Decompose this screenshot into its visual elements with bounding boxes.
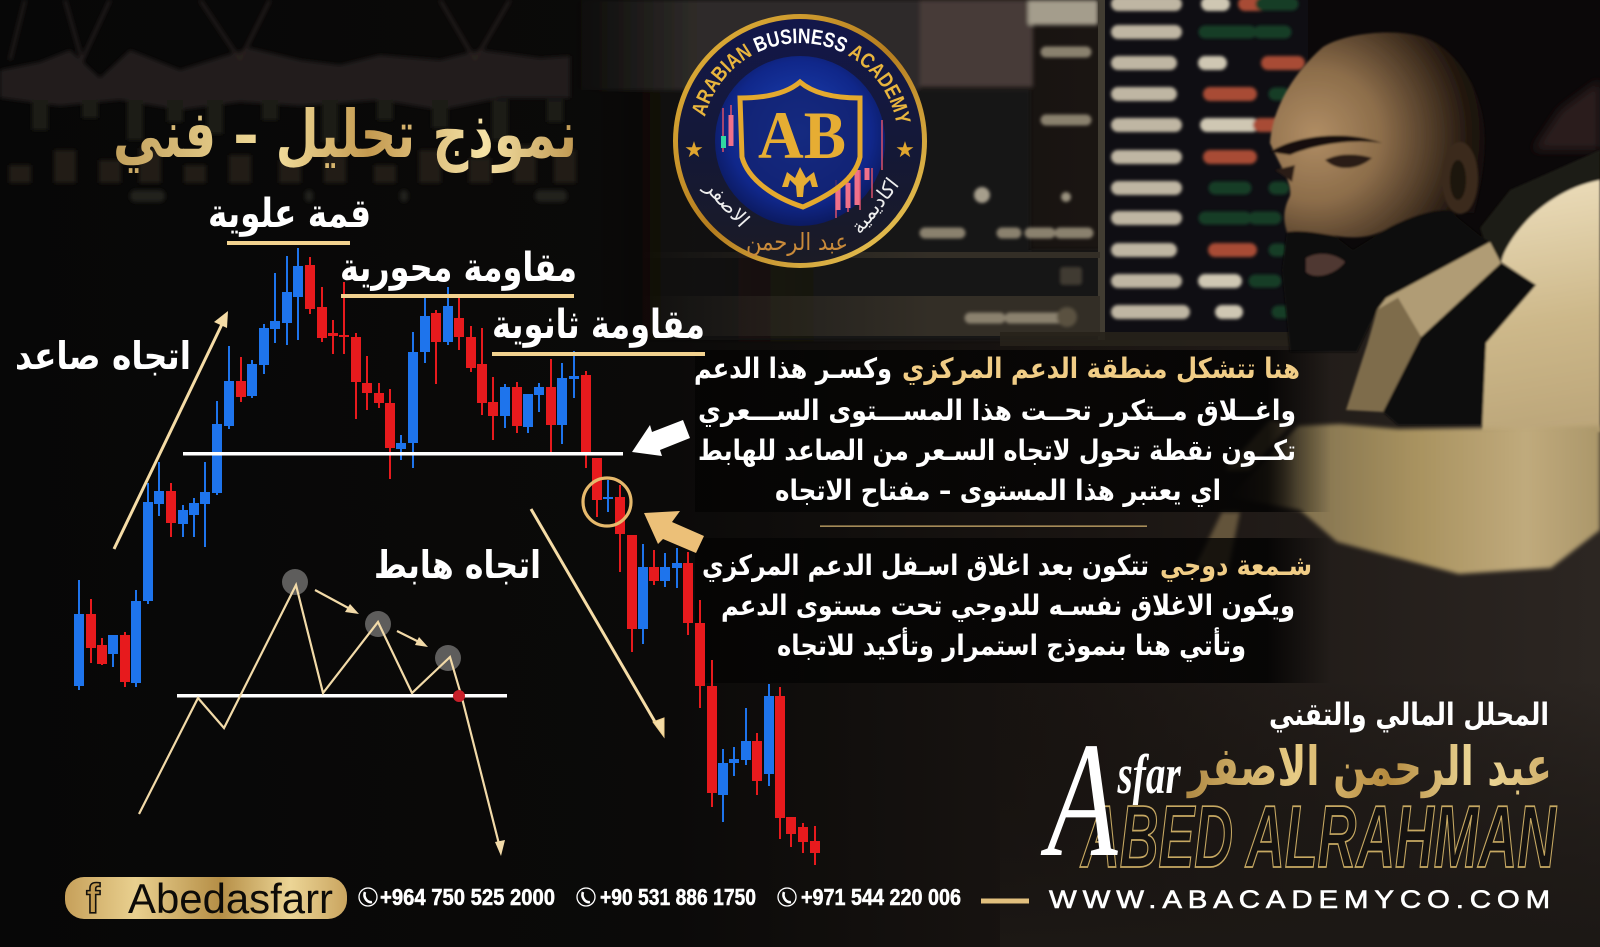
- cream shoulder behind: [1501, 178, 1600, 300]
- icon: phone 3: [778, 888, 796, 906]
- explanation text: doji: [702, 549, 1312, 663]
- highlighted phrase: هنا تتشكل منطقة الدعم المركزي: [902, 352, 1300, 385]
- icon: facebook: f: [86, 875, 101, 922]
- mini diagram: descending peaks pattern: [139, 569, 507, 856]
- star right: ★: [895, 138, 915, 163]
- eyes: [1275, 154, 1372, 182]
- monogram emblem: [782, 167, 818, 197]
- background chair: [1533, 80, 1600, 150]
- icon: phone 2: [577, 888, 595, 906]
- text band: pivot support explanation background: [695, 350, 1331, 512]
- line 2: واغــلاق مــتكرر تحــت هذا المســـتوى الســـعري: [698, 394, 1296, 427]
- doji highlight circle: [583, 478, 631, 526]
- arabic name: عبد الرحمن: [746, 228, 848, 256]
- label: uptrend: اتجاه صاعد: [15, 334, 191, 378]
- pivot support line: [183, 452, 623, 456]
- line 1 end: تتكون بعد اغلاق اسـفل الدعم المركزي: [702, 549, 1149, 582]
- candlestick chart: [79, 248, 815, 865]
- label: secondary resistance: مقاومة ثانوية: [492, 302, 705, 348]
- logo chart candles: [721, 105, 882, 218]
- label: downtrend: اتجاه هابط: [374, 543, 541, 587]
- resistance underline: top: [227, 241, 350, 245]
- stars: ★: [684, 138, 704, 163]
- arabic left: الاصفر: [699, 174, 755, 232]
- trading screen with quote table: [640, 0, 1310, 346]
- website: WWW.ABACADEMYCO.COM: [1049, 886, 1556, 914]
- arrow: white pointer to support line: [632, 420, 690, 456]
- blurred chart backdrop: [0, 0, 1100, 340]
- shield: [740, 82, 860, 207]
- line 2: ويكون الاغلاق نفسـه للدوجي تحت مستوى الدعم: [721, 589, 1295, 622]
- highlighted phrase: شـمعة دوجي: [1160, 549, 1312, 582]
- collar: [1377, 242, 1501, 337]
- hand shapes: [1196, 420, 1290, 570]
- explanation text: pivot support: [694, 352, 1300, 507]
- title: نموذج تحليل – فني: [113, 96, 577, 174]
- handle: Abedasfarr: [128, 875, 333, 922]
- arrow: uptrend: [114, 311, 228, 549]
- divider: [820, 526, 1147, 527]
- blue candles: [79, 248, 769, 822]
- label: pivot resistance: مقاومة محورية: [340, 245, 577, 291]
- text band: doji explanation background: [695, 538, 1331, 683]
- AB monogram: AB: [758, 97, 846, 173]
- signature: sfar: [1117, 744, 1182, 806]
- lips: [1306, 254, 1345, 276]
- head: [1270, 32, 1485, 237]
- arabic right: اكاديمية: [845, 173, 904, 238]
- resistance underline: secondary: [492, 352, 705, 356]
- line 3: وتأتي هنا بنموذج استمرار وتأكيد للاتجاه: [777, 627, 1246, 663]
- shirt front: [1346, 298, 1421, 412]
- phone 3: +971 544 220 006: [801, 884, 961, 910]
- red candles: [91, 257, 815, 865]
- eyebrow: [1270, 136, 1382, 155]
- accent dash: [981, 898, 1029, 904]
- resistance underline: pivot: [341, 294, 574, 298]
- facebook pill: [65, 875, 347, 922]
- phone numbers: [359, 884, 961, 910]
- label: upper peak: قمة علوية: [208, 191, 371, 237]
- arrow: gold pointer to doji: [644, 511, 704, 553]
- icon: phone 1: [359, 888, 377, 906]
- neck and beard: [1282, 200, 1490, 352]
- line 3: تكــون نقطة تحول لاتجاه السـعر من الصاعد للهابط: [698, 434, 1296, 467]
- ring lettering: ARABIAN BUSINESS ACADEMY: [692, 28, 911, 122]
- portrait of analyst: [1196, 32, 1600, 574]
- arrow: downtrend: [531, 509, 664, 737]
- line 4: اي يعتبر هذا المستوى – مفتاح الاتجاه: [775, 474, 1221, 507]
- upper sleeve: [1482, 285, 1600, 432]
- phone 2: +90 531 886 1750: [600, 884, 756, 910]
- ear: [1442, 142, 1478, 214]
- vest: [1383, 263, 1536, 425]
- academy logo badge: [673, 14, 927, 268]
- line 1 end: وكسـر هذا الدعم: [694, 352, 892, 385]
- signature: A: [1047, 708, 1118, 891]
- phone 1: +964 750 525 2000: [380, 884, 555, 910]
- forearm: [1230, 424, 1600, 574]
